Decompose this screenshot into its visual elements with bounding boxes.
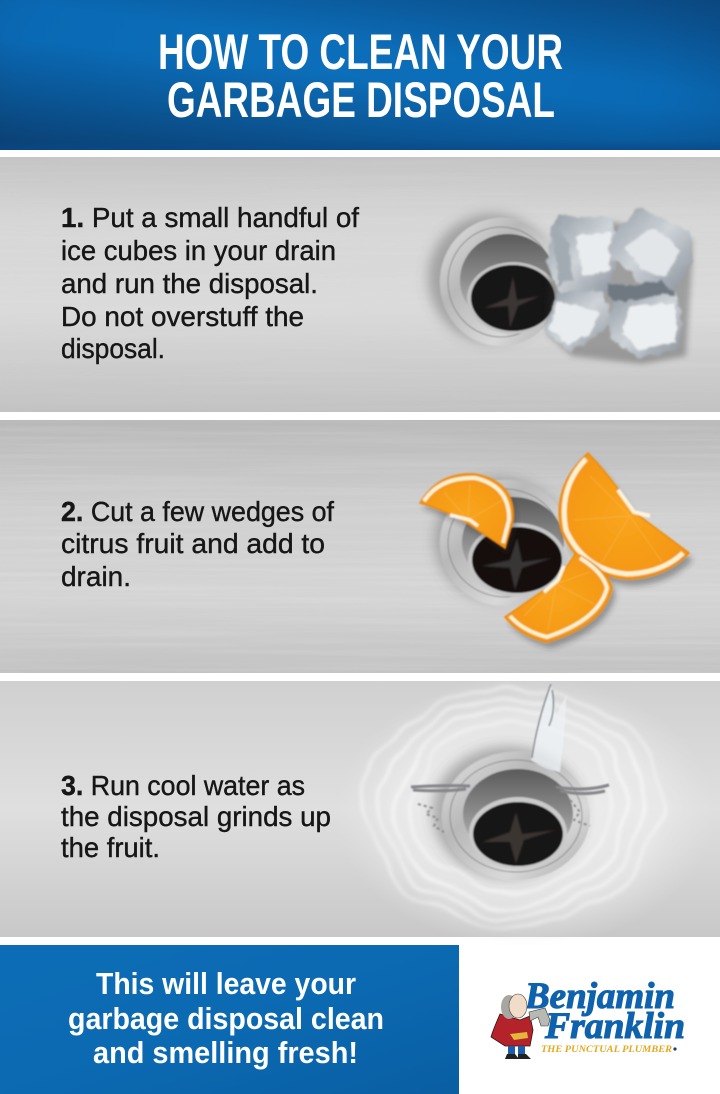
- orange wedge right: [559, 453, 693, 586]
- step 3 text: [61, 770, 331, 863]
- header banner: [0, 0, 720, 150]
- orange wedge bottom: [505, 553, 616, 648]
- footer callout: [0, 945, 459, 1094]
- step 3 text: the fruit.: [61, 832, 160, 863]
- step 1 text: and run the disposal.: [61, 268, 318, 299]
- logo wordmark: [524, 976, 685, 1047]
- step 2 text: drain.: [61, 561, 131, 592]
- title: GARBAGE DISPOSAL: [167, 72, 555, 128]
- logo: Benjamin Franklin: [491, 976, 685, 1059]
- logo mascot: [491, 994, 550, 1059]
- step 1 text: ice cubes in your drain: [61, 235, 336, 266]
- water ripples: [364, 689, 660, 925]
- step 1 text: [61, 202, 359, 364]
- icon: drain 1: [428, 214, 562, 346]
- title: HOW TO CLEAN YOUR: [158, 24, 563, 80]
- footer callout: This will leave your: [96, 966, 356, 1001]
- icon: water stream and splash: [411, 683, 609, 832]
- icon: drain 3: [432, 746, 590, 880]
- footer callout: and smelling fresh!: [93, 1035, 358, 1070]
- panel: step 2 citrus: [0, 420, 720, 673]
- step 2 text: [61, 496, 334, 592]
- footer callout: garbage disposal clean: [68, 1001, 384, 1036]
- ice cube 4: [608, 292, 682, 358]
- ice cube 3: [545, 290, 612, 350]
- logo tagline: THE PUNCTUAL PLUMBER: [541, 1045, 672, 1055]
- step 1 text: disposal.: [61, 333, 165, 364]
- panel: step 1 ice cubes: [0, 157, 720, 412]
- icon: orange wedges: [420, 453, 693, 648]
- step 3 text: the disposal grinds up: [61, 801, 331, 832]
- title: [158, 24, 563, 128]
- step 2 text: citrus fruit and add to: [61, 528, 325, 559]
- registered mark: [673, 1047, 677, 1051]
- icon: drain 2: [434, 478, 570, 606]
- step 1 text: Do not overstuff the: [61, 301, 304, 332]
- panel: step 3 water: [0, 677, 720, 947]
- step 3 text: 3. Run cool water as: [61, 770, 305, 801]
- icon: ice cubes: [545, 206, 692, 364]
- orange wedge left: [420, 474, 516, 554]
- logo wordmark: Benjamin: [524, 976, 675, 1017]
- step 2 text: 2. Cut a few wedges of: [61, 496, 334, 527]
- ice cube 1: [546, 216, 620, 292]
- step 1 text: 1. Put a small handful of: [61, 202, 359, 233]
- ice cube 2: [606, 206, 692, 290]
- logo wordmark: Franklin: [544, 1006, 685, 1047]
